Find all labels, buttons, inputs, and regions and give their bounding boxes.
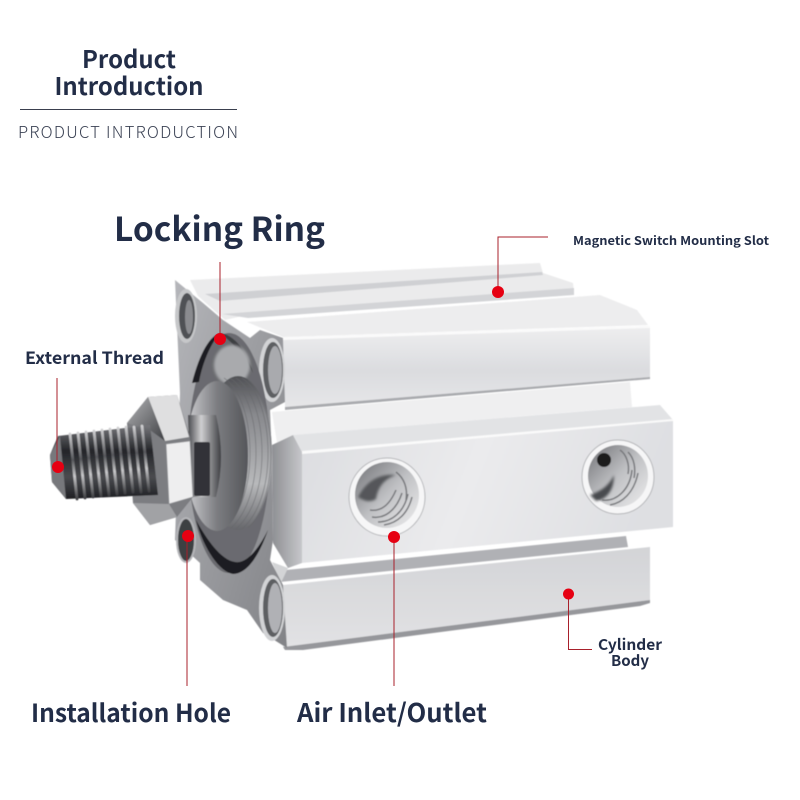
air port left [349, 458, 425, 536]
leader line: Air Inlet/Outlet [393, 537, 395, 686]
mounting hole lower right [259, 575, 285, 641]
heading: Product Introduction: Product [82, 41, 176, 76]
hex nut [127, 395, 193, 525]
threaded rod [50, 425, 158, 499]
cylinder product illustration [50, 263, 673, 650]
lower block top face [293, 405, 673, 452]
label: Magnetic Switch Mounting Slot: Magnetic Switch Mounting Slot [573, 232, 769, 249]
mounting hole top left [175, 289, 197, 343]
heading: Product Introduction: PRODUCT INTRODUCTION [18, 119, 238, 143]
back top rail [190, 263, 574, 320]
leader line: Magnetic Switch Mounting Slot [498, 237, 548, 292]
threaded end cap [186, 376, 272, 531]
label: Cylinder Body [598, 634, 662, 671]
upper block front face [283, 326, 650, 407]
mounting hole lower left [177, 518, 195, 562]
label: External Thread: External Thread [25, 344, 164, 369]
leader line: Locking Ring [219, 262, 221, 339]
lower chamfer [272, 435, 302, 568]
middle channel [272, 382, 632, 443]
label: Cylinder Body: Body [611, 650, 649, 671]
leader line: External Thread [56, 378, 58, 467]
heading: Product Introduction: Introduction [54, 68, 204, 103]
bottom block [283, 547, 650, 647]
rod collar [188, 415, 221, 497]
leader line: Installation Hole [186, 536, 188, 686]
lower block front face [302, 420, 673, 563]
heading: Product Introduction [18, 41, 238, 143]
label: Air Inlet/Outlet: Air Inlet/Outlet [296, 693, 487, 730]
mounting hole top right [259, 338, 285, 402]
label: Locking Ring: Locking Ring [114, 203, 325, 251]
air port right [582, 440, 654, 514]
leader line: Cylinder Body [568, 594, 592, 650]
upper block top face [247, 295, 648, 337]
marker dots [52, 286, 574, 600]
bore opening [188, 333, 270, 573]
end plate [175, 280, 287, 648]
label: Installation Hole: Installation Hole [31, 694, 231, 730]
label: Cylinder Body: Cylinder [598, 634, 662, 655]
lower channel [280, 536, 628, 582]
